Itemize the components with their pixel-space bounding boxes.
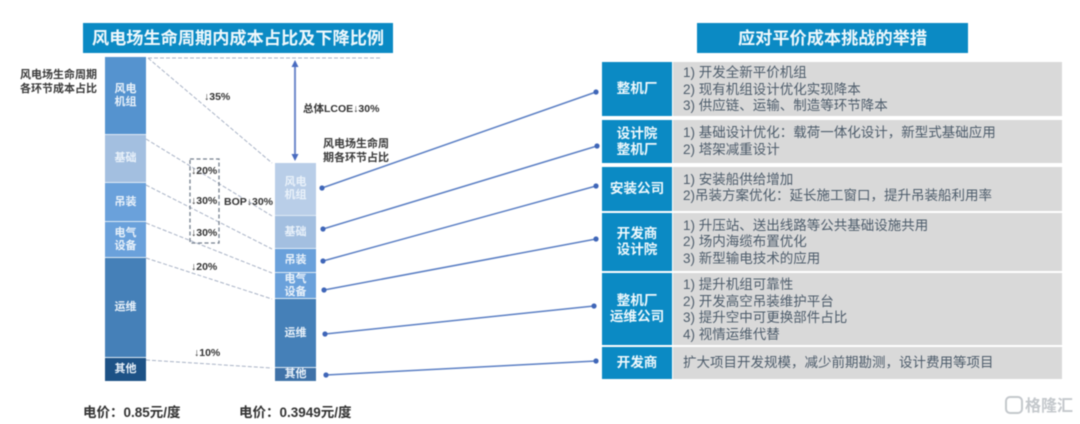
row: design institute and turbine makers: [601, 119, 1062, 164]
segment: installation: 吊装: [284, 254, 306, 266]
segment: electrical: 电气: [284, 272, 306, 284]
row: design institute and turbine makers: 1) 基础设计优化：载荷一体化设计，新型式基础应用: [683, 125, 996, 140]
row: installation companies: 2)吊装方案优化：延长施工窗口，提升吊装船利用率: [683, 188, 992, 203]
segment: operations: 运维: [284, 326, 306, 338]
segment: electrical: 电气: [114, 226, 136, 238]
segment: operations: [275, 299, 316, 368]
segment: turbine: 风电: [114, 82, 136, 94]
row: developers and design institutes: 开发商: [617, 226, 657, 241]
segment: installation: [275, 249, 316, 273]
label: price after: 电价：0.3949元/度: [239, 405, 352, 420]
label: BOP decrease: BOP↓30%: [224, 196, 273, 208]
segment: operations: 运维: [114, 301, 136, 313]
stacked bar: lifetime cost shares after: [274, 162, 317, 382]
note: left stack description: [20, 68, 98, 94]
segment: operations: [105, 258, 146, 358]
segment: electrical: [275, 273, 316, 299]
segment: other: 其他: [114, 363, 136, 375]
segment: turbine: [105, 57, 146, 135]
row: installation companies: [601, 166, 1062, 212]
note: right stack description: [322, 136, 390, 164]
row: turbine makers: [601, 61, 1062, 117]
note: left stack description: 风电场生命周期: [20, 69, 97, 81]
row: developers and design institutes: 1) 升压站、送出线路等公共基础设施共用: [683, 218, 928, 233]
title: left panel heading: 风电场生命周期内成本占比及下降比例: [92, 28, 384, 48]
row: turbine makers: 整机厂: [617, 81, 657, 96]
segment: foundation: [275, 216, 316, 249]
segment: electrical: [105, 222, 146, 258]
label: turbine decrease: ↓35%: [204, 91, 230, 103]
row: developers: 开发商: [617, 355, 657, 370]
segment: turbine: 机组: [114, 96, 136, 108]
segment: turbine: 风电: [284, 176, 306, 188]
segment: installation: 吊装: [114, 196, 136, 208]
row: turbine makers and O&M companies: [601, 272, 1062, 346]
row: turbine makers and O&M companies: 1) 提升机组可靠性: [683, 277, 793, 292]
label: price before: 电价：0.85元/度: [83, 405, 181, 420]
stacked bar: lifetime cost shares before: [104, 56, 147, 382]
segment: electrical: 设备: [284, 286, 306, 298]
row: turbine makers: 3) 供应链、运输、制造等环节降本: [683, 98, 888, 113]
row: developers and design institutes: 2) 场内海缆布置优化: [683, 234, 807, 249]
label: foundation decrease: ↓20%: [191, 165, 217, 177]
segment: foundation: 基础: [284, 226, 306, 238]
segment: turbine: [275, 163, 316, 216]
row: developers and design institutes: 3) 新型输电技术的应用: [683, 251, 820, 266]
note: right stack description: 风电场生命周: [323, 138, 389, 150]
row: developers and design institutes: [601, 212, 1062, 272]
segment: other: [275, 368, 316, 381]
label: overall LCOE decrease: 总体LCOE↓30%: [303, 103, 379, 115]
row: turbine makers and O&M companies: 3) 提升空中可更换部件占比: [683, 310, 847, 325]
row: turbine makers and O&M companies: 4) 视情运维代替: [683, 326, 780, 342]
row: developers and design institutes: 设计院: [617, 242, 657, 257]
row: design institute and turbine makers: 设计院: [617, 126, 657, 140]
row: turbine makers and O&M companies: 2) 开发高空吊装维护平台: [683, 294, 834, 308]
row: developers: [601, 346, 1062, 380]
watermark: 格隆汇: [1025, 398, 1073, 415]
row: turbine makers: 1) 开发全新平价机组: [683, 65, 807, 80]
segment: installation: [105, 183, 146, 222]
segment: electrical: 设备: [114, 240, 136, 252]
segment: foundation: 基础: [114, 152, 136, 164]
note: left stack description: 各环节成本占比: [20, 82, 97, 94]
title: right panel heading: [697, 23, 968, 53]
label: installation decrease: ↓30%: [191, 195, 217, 207]
segment: foundation: [105, 135, 146, 183]
segment: turbine: 机组: [284, 189, 306, 201]
row: turbine makers: 2) 现有机组设计优化实现降本: [683, 82, 861, 97]
label: operations decrease: ↓20%: [191, 261, 217, 273]
row: installation companies: 1) 安装船供给增加: [683, 172, 793, 186]
watermark: [1004, 396, 1073, 415]
row: developers: 扩大项目开发规模，减少前期勘测，设计费用等项目: [683, 355, 994, 370]
row: turbine makers and O&M companies: 整机厂: [617, 293, 657, 308]
segment: other: 其他: [284, 368, 306, 380]
segment: other: [105, 358, 146, 381]
row: installation companies: 安装公司: [610, 181, 664, 196]
label: electrical decrease: ↓30%: [191, 227, 217, 239]
row: design institute and turbine makers: 2) 塔架减重设计: [683, 142, 780, 156]
title: right panel heading: 应对平价成本挑战的举措: [738, 28, 927, 48]
row: turbine makers and O&M companies: 运维公司: [610, 309, 664, 324]
label: other decrease: ↓10%: [194, 347, 220, 359]
note: right stack description: 期各环节占比: [323, 152, 389, 164]
title: left panel heading: [83, 23, 393, 53]
row: design institute and turbine makers: 整机厂: [617, 142, 657, 156]
